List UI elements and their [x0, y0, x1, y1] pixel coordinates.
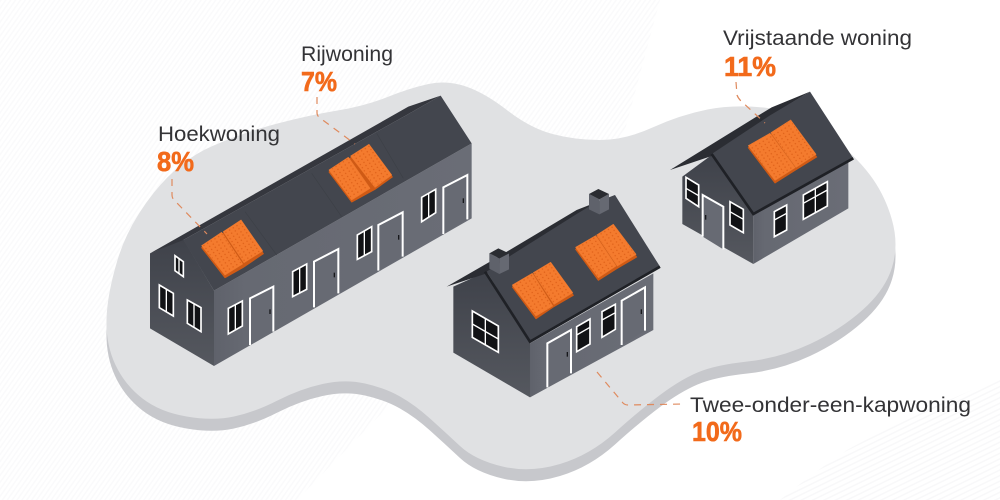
label: Twee-onder-een-kapwoning 10% [690, 394, 971, 447]
solar panels right [576, 224, 637, 280]
front doors [250, 175, 467, 345]
leader line: Twee-onder-een-kapwoning [597, 372, 683, 405]
label: Hoekwoning 8%: Hoekwoning [158, 123, 280, 146]
chimney right [589, 189, 609, 214]
blob shadow [106, 94, 896, 481]
label: Rijwoning 7%: Rijwoning [301, 43, 393, 66]
front windows [228, 189, 436, 334]
gable wall [453, 272, 530, 397]
leader line: Rijwoning [317, 97, 355, 144]
leader line: Vrijstaande woning [736, 82, 765, 123]
solar panels corner home [202, 220, 263, 278]
rear roof and left eave [670, 92, 810, 170]
house: row of homes (Rijwoning / Hoekwoning) [150, 96, 472, 366]
gable wall [150, 239, 214, 366]
gable windows [159, 256, 201, 332]
leader line: Hoekwoning [172, 179, 207, 234]
front wall [214, 143, 472, 366]
background stripes bottom-right [780, 378, 1000, 500]
gable windows and door [686, 177, 743, 249]
label: Rijwoning 7%: 7% [301, 66, 337, 97]
front roof slope [712, 92, 853, 215]
roof eave [712, 154, 853, 214]
rear roof and left eave [447, 195, 615, 287]
house: semi-detached (Twee-onder-een-kapwoning) [447, 189, 660, 397]
blob surface [106, 82, 896, 469]
label: Twee-onder-een-kapwoning 10%: Twee-onder-een-kapwoning [690, 394, 971, 417]
roof eave [485, 267, 660, 342]
label: Vrijstaande woning 11%: 11% [724, 51, 776, 82]
front windows [774, 182, 827, 237]
solar panels [748, 120, 817, 183]
label: Vrijstaande woning 11%: Vrijstaande woning [723, 27, 912, 50]
gable wall [682, 155, 753, 264]
label: Rijwoning 7% [301, 43, 393, 97]
gable window [472, 311, 498, 352]
rear roof slope [150, 96, 441, 253]
label: Hoekwoning 8%: 8% [157, 146, 194, 177]
blob platform [106, 82, 896, 481]
background stripes top-left [0, 0, 660, 500]
solar panels left [512, 262, 573, 319]
front wall [753, 162, 848, 264]
front wall [530, 273, 653, 397]
front doors and windows [547, 287, 645, 387]
front roof slope [487, 195, 660, 342]
label: Hoekwoning 8% [157, 123, 280, 177]
front roof slope [183, 96, 472, 291]
house: detached (Vrijstaande woning) [670, 92, 853, 264]
chimney left [489, 248, 509, 274]
solar panels row home [329, 144, 392, 202]
label: Vrijstaande woning 11% [723, 27, 912, 82]
label: Twee-onder-een-kapwoning 10%: 10% [692, 416, 742, 447]
